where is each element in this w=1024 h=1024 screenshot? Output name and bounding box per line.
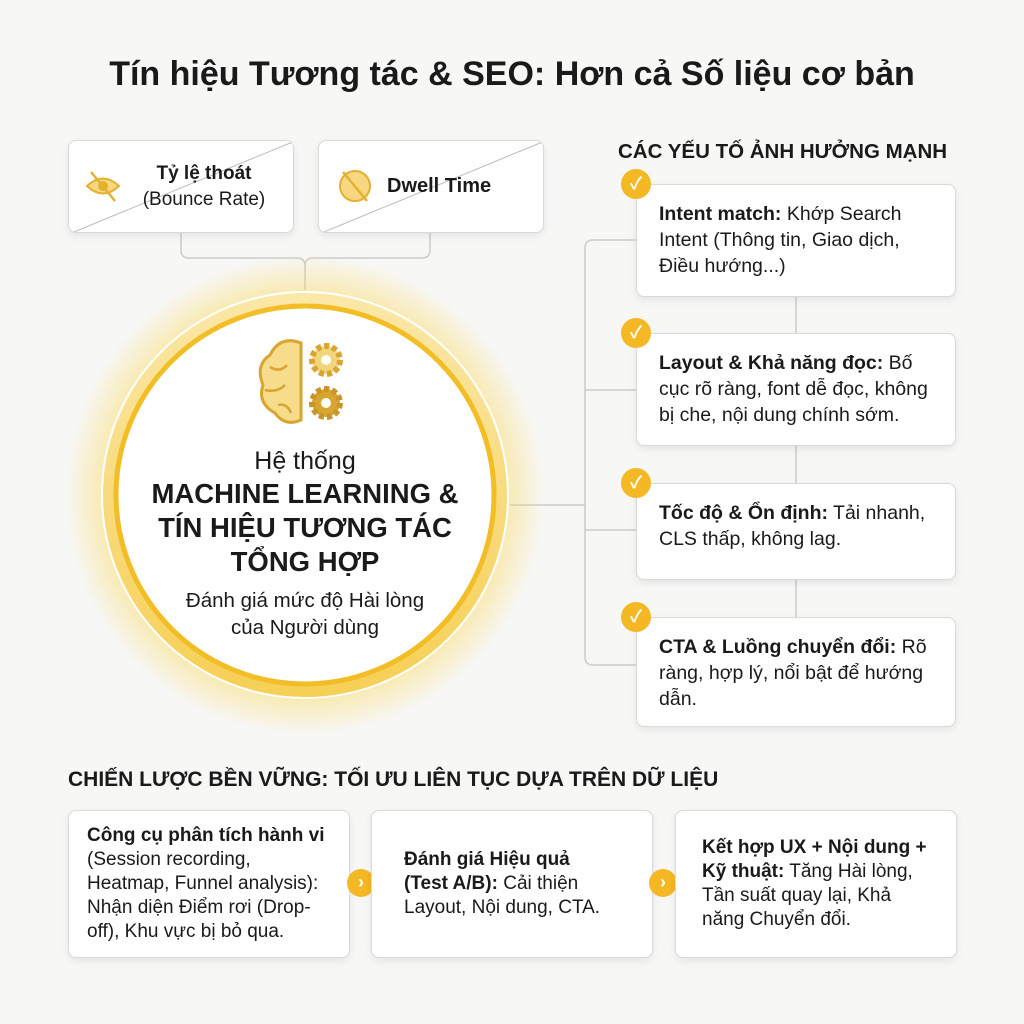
check 1	[621, 169, 651, 199]
circle text: TỔNG HỢP	[231, 546, 379, 577]
circle text: Đánh giá mức độ Hài lòng	[186, 589, 424, 612]
circle text	[151, 447, 459, 639]
check 3: ✓	[630, 473, 642, 492]
factor 2	[636, 333, 956, 446]
factor 3	[636, 483, 956, 580]
card: bounce rate: (Bounce Rate)	[143, 189, 265, 210]
strategy 3: Kết hợp UX + Nội dung + Kỹ thuật: Tăng Hài lòng, Tần suất quay lại, Khả năng Chuyển đổi.	[702, 837, 927, 930]
heading: factors: CÁC YẾU TỐ ẢNH HƯỞNG MẠNH	[618, 140, 947, 163]
circle text: MACHINE LEARNING &	[151, 478, 459, 509]
icon: brain and gears	[260, 341, 340, 422]
heading: strategy: CHIẾN LƯỢC BỀN VỮNG: TỐI ƯU LIÊN TỤC DỰA TRÊN DỮ LIỆU	[68, 768, 718, 791]
strategy 1	[68, 810, 350, 958]
icon: crossed eye	[87, 172, 119, 201]
check 4	[621, 602, 651, 632]
factor 4: CTA & Luồng chuyển đổi: Rõ ràng, hợp lý, nổi bật để hướng dẫn.	[659, 636, 927, 710]
strategy 2: Đánh giá Hiệu quả (Test A/B): Cải thiện Layout, Nội dung, CTA.	[404, 849, 600, 918]
card: dwell time	[318, 140, 544, 233]
strategy 2	[371, 810, 653, 958]
factor 3: Tốc độ & Ổn định: Tải nhanh, CLS thấp, không lag.	[659, 502, 925, 550]
strategy 3	[675, 810, 957, 958]
circle text: TÍN HIỆU TƯƠNG TÁC	[158, 512, 452, 543]
card: bounce rate	[68, 140, 294, 233]
card: dwell time: Dwell Time	[387, 175, 491, 197]
arrow 1: ›	[358, 872, 364, 892]
check 2: ✓	[630, 323, 642, 342]
strategy 1: Công cụ phân tích hành vi (Session recording, Heatmap, Funnel analysis): Nhận diện Điểm rơi (Drop-off), Khu vực bị bỏ qua.	[87, 825, 324, 942]
arrow 2	[649, 869, 677, 897]
card: bounce rate: Tỷ lệ thoát	[156, 163, 252, 184]
factor 2: Layout & Khả năng đọc: Bố cục rõ ràng, font dễ đọc, không bị che, nội dung chính sớm.	[659, 352, 928, 426]
check 2	[621, 318, 651, 348]
check 3	[621, 468, 651, 498]
check 4: ✓	[630, 607, 642, 626]
circle text: Hệ thống	[254, 447, 356, 475]
factor 1	[636, 184, 956, 297]
title: Tín hiệu Tương tác & SEO: Hơn cả Số liệu cơ bản	[109, 55, 915, 93]
central circle	[70, 260, 540, 730]
check 1: ✓	[630, 174, 642, 193]
factor 1: Intent match: Khớp Search Intent (Thông tin, Giao dịch, Điều hướng...)	[659, 203, 902, 277]
factor 4	[636, 617, 956, 727]
icon: crossed clock	[340, 171, 370, 201]
circle text: của Người dùng	[231, 616, 379, 639]
arrow 2: ›	[660, 872, 666, 892]
arrow 1	[347, 869, 375, 897]
